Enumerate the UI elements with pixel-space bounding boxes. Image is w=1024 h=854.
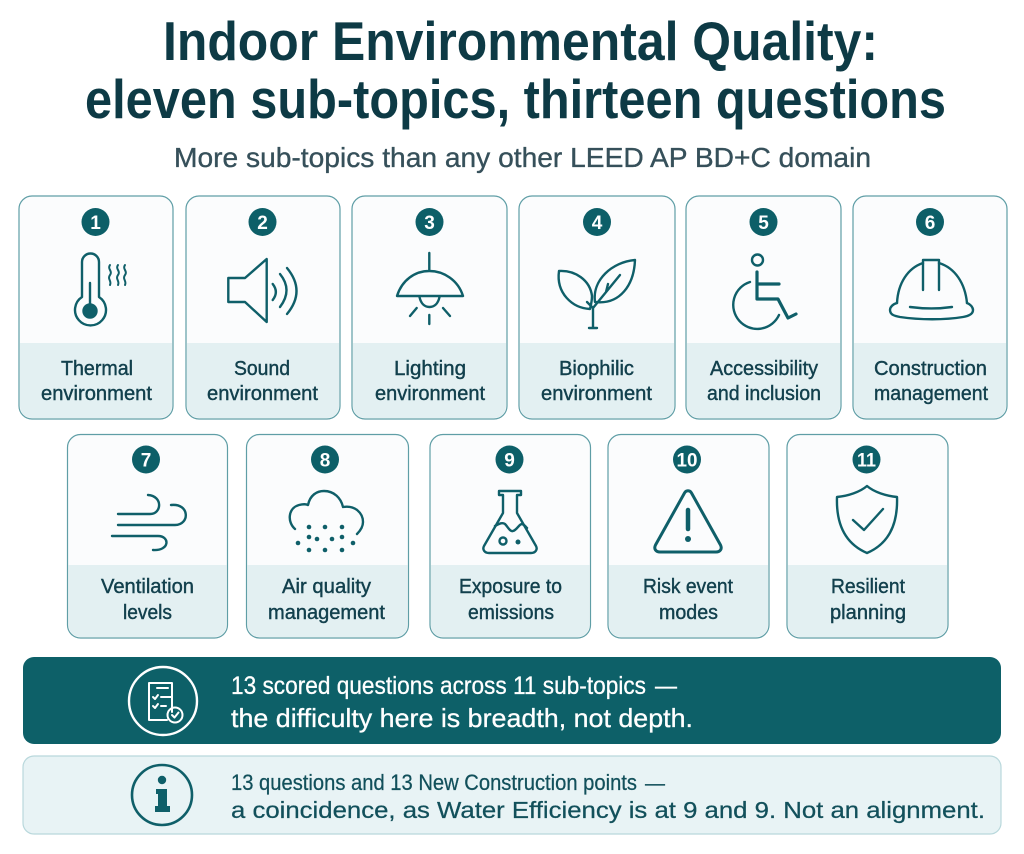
- badge 1: 1: [90, 213, 101, 234]
- badge 9: [496, 446, 524, 474]
- card 5: accessibility and inclusion: [686, 196, 841, 419]
- badge 7: 7: [141, 450, 151, 472]
- label: environment: [541, 383, 652, 405]
- label: emissions: [468, 602, 554, 624]
- badge 9: 9: [504, 450, 515, 472]
- badge 8: 8: [320, 450, 330, 472]
- label: Thermal: [61, 358, 133, 380]
- note text: [231, 770, 985, 823]
- badge 7: [132, 446, 160, 474]
- subtitle: More sub-topics than any other LEED AP BD+C domain: [174, 142, 871, 173]
- card 9: exposure to emissions: [430, 434, 590, 638]
- callout text: [231, 672, 693, 733]
- label: environment: [375, 383, 485, 405]
- badge 5: [750, 208, 778, 236]
- label: Biophilic: [559, 358, 634, 380]
- icon: pendant lamp: [397, 253, 463, 324]
- label: [541, 358, 652, 405]
- icon: speaker: [228, 259, 296, 322]
- label: Risk event: [643, 576, 733, 598]
- title: [85, 10, 946, 130]
- note text: —: [645, 771, 665, 795]
- label: [707, 358, 821, 405]
- callout: breadth banner: [23, 657, 1001, 744]
- badge 11: [852, 446, 880, 474]
- badge 8: [311, 446, 339, 474]
- icon: flask: [483, 491, 537, 553]
- label: Exposure to: [459, 576, 562, 598]
- badge 2: 2: [257, 213, 268, 234]
- label: environment: [207, 383, 318, 405]
- card 1: thermal environment: [19, 196, 173, 419]
- label: Sound: [234, 358, 290, 380]
- icon: info circle: [132, 765, 192, 825]
- callout text: the difficulty here is breadth, not depth.: [231, 703, 693, 733]
- icon: checklist in circle: [129, 667, 197, 735]
- icon: cloud with particles: [290, 491, 363, 552]
- badge 6: 6: [925, 213, 935, 234]
- label: Lighting: [394, 358, 466, 380]
- label: Construction: [874, 358, 987, 380]
- icon: wind: [112, 495, 186, 550]
- badge 5: 5: [758, 213, 769, 234]
- card 2: sound environment: [186, 196, 340, 419]
- icon: shield with check: [837, 486, 897, 553]
- label: [830, 576, 906, 624]
- label: levels: [123, 602, 172, 624]
- label: Ventilation: [101, 576, 194, 598]
- badge 1: [82, 208, 110, 236]
- note text: a coincidence, as Water Efficiency is at 9 and 9. Not an alignment.: [231, 797, 985, 823]
- label: Resilient: [831, 576, 905, 598]
- label: management: [268, 602, 385, 624]
- label: [268, 576, 385, 624]
- label: [207, 358, 318, 405]
- card 8: air quality management: [246, 434, 408, 638]
- label: Accessibility: [710, 358, 818, 380]
- label: environment: [41, 383, 152, 405]
- badge 11: 11: [857, 450, 876, 472]
- label: management: [874, 383, 988, 405]
- badge 3: 3: [424, 213, 435, 234]
- label: Air quality: [282, 576, 371, 598]
- badge 2: [248, 208, 276, 236]
- label: [459, 576, 562, 624]
- callout text: 13 scored questions across 11 sub-topics: [231, 672, 646, 700]
- icon: thermometer: [75, 254, 126, 325]
- badge 10: [673, 446, 701, 474]
- icon: hard hat: [890, 260, 973, 319]
- badge 4: 4: [592, 213, 603, 234]
- badge 6: [916, 208, 944, 236]
- callout: coincidence note: [23, 756, 1001, 834]
- badge 4: [583, 208, 611, 236]
- label: [643, 576, 733, 624]
- label: [41, 358, 152, 405]
- label: and inclusion: [707, 383, 821, 405]
- card 3: lighting environment: [352, 196, 507, 419]
- callout text: —: [655, 673, 677, 700]
- card 4: biophilic environment: [519, 196, 675, 419]
- icon: leaves: [559, 260, 635, 328]
- badge 3: [416, 208, 444, 236]
- label: planning: [830, 602, 906, 624]
- title: Indoor Environmental Quality:: [163, 10, 878, 72]
- label: [375, 358, 485, 405]
- label: [101, 576, 194, 624]
- label: modes: [659, 602, 718, 624]
- badge 10: 10: [676, 450, 698, 472]
- note text: 13 questions and 13 New Construction points: [231, 770, 637, 795]
- icon: wheelchair: [733, 254, 796, 329]
- card 6: construction management: [853, 196, 1007, 419]
- icon: warning triangle: [655, 491, 721, 552]
- label: [874, 358, 988, 405]
- card 10: risk event modes: [608, 434, 769, 638]
- card 7: ventilation levels: [68, 434, 228, 638]
- card 11: resilient planning: [787, 434, 948, 638]
